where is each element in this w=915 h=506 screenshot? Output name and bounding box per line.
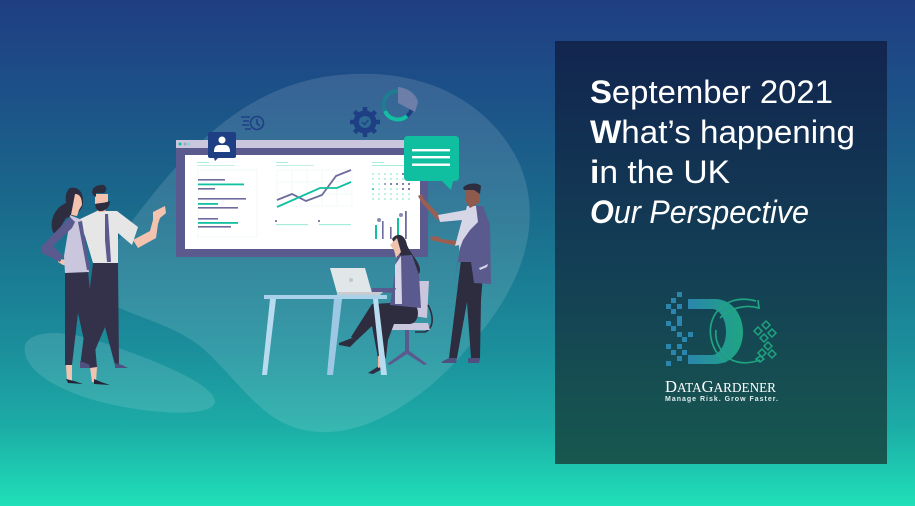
icon: donut chart bbox=[384, 87, 418, 119]
small bar chart bbox=[375, 211, 407, 239]
title: in the UK bbox=[590, 154, 730, 190]
logo C bbox=[710, 299, 760, 363]
illustration: desk and seated woman bbox=[262, 235, 432, 375]
logo tagline: Manage Risk. Grow Faster. bbox=[665, 396, 778, 403]
title: September 2021 bbox=[590, 74, 833, 110]
woman bbox=[41, 188, 110, 385]
illustration: presentation screen bbox=[176, 140, 428, 257]
seated woman bbox=[339, 235, 421, 374]
background blobs bbox=[25, 74, 530, 432]
panel: title and logo bbox=[555, 41, 887, 464]
logo pixels bbox=[666, 292, 693, 366]
man bbox=[78, 185, 166, 368]
title: Our Perspective bbox=[590, 194, 809, 230]
icon: gear bbox=[350, 107, 380, 137]
desk bbox=[262, 295, 387, 375]
laptop bbox=[330, 268, 383, 295]
line chart bbox=[275, 162, 352, 225]
logo knots bbox=[754, 321, 776, 362]
illustration: standing man with jacket bbox=[418, 184, 491, 363]
title bbox=[590, 74, 855, 230]
dot matrix bbox=[372, 162, 410, 200]
icon: clock bbox=[241, 116, 264, 130]
illustration: standing couple bbox=[41, 185, 166, 385]
icon: user badge bbox=[208, 132, 236, 161]
title: What’s happening bbox=[590, 114, 855, 150]
chair bbox=[385, 281, 432, 365]
logo: DataGardener bbox=[665, 292, 778, 403]
logo D bbox=[688, 299, 743, 364]
bar list chart bbox=[197, 162, 257, 237]
logo wordmark: DATAGARDENER bbox=[665, 377, 776, 396]
icon: speech bubble bbox=[404, 136, 459, 190]
